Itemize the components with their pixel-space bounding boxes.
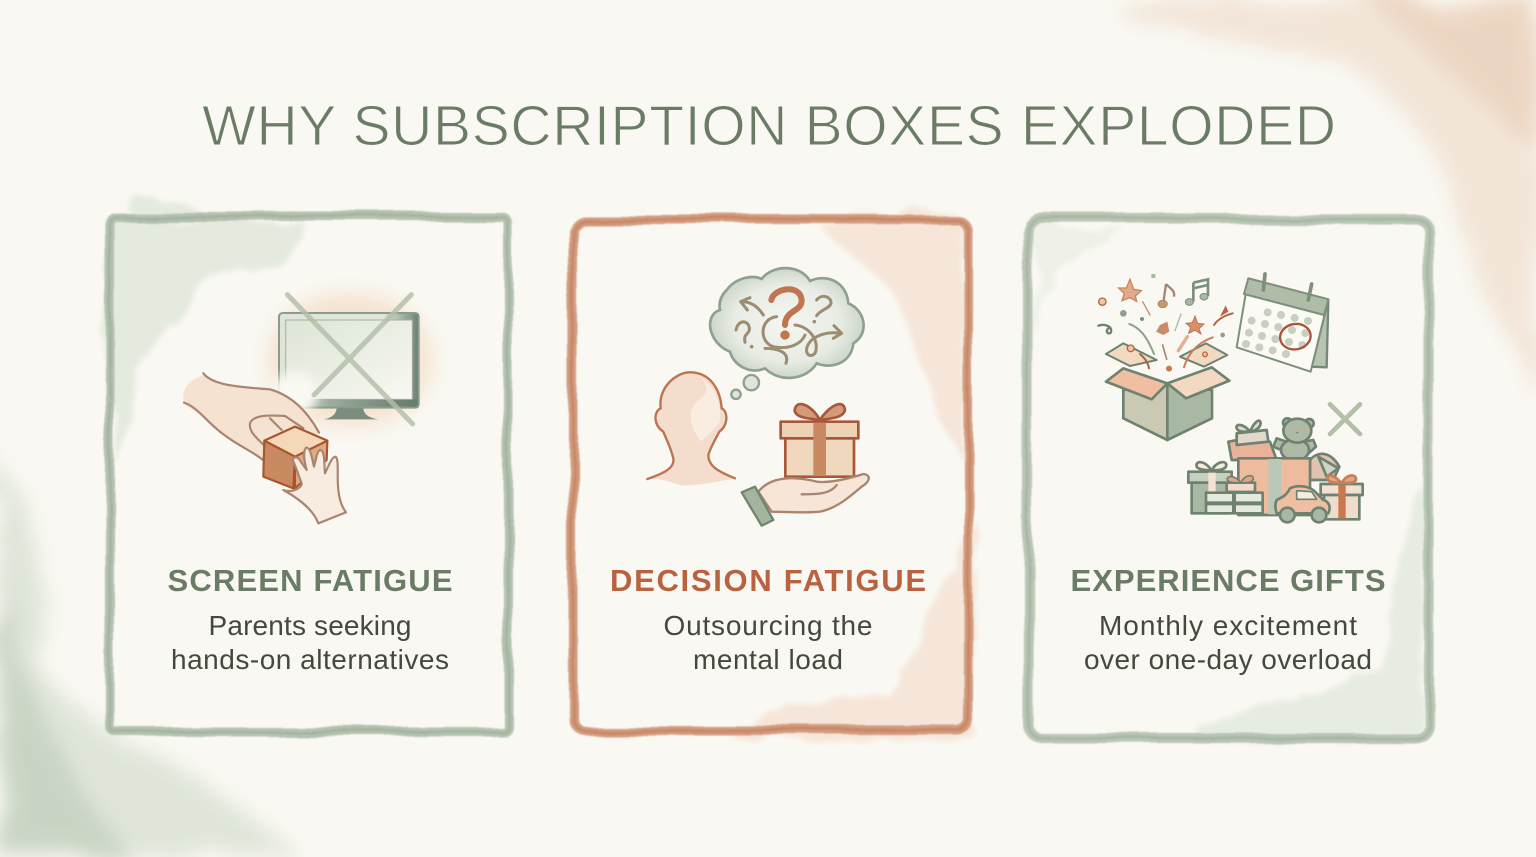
adult hand: [183, 373, 319, 465]
description: [171, 610, 449, 675]
calendar: [1237, 274, 1328, 372]
card wash: green blotches: [1035, 225, 1425, 740]
card frame: [110, 217, 508, 732]
title: WHY SUBSCRIPTION BOXES EXPLODED: [202, 94, 1336, 158]
card wash: green blotches: [106, 196, 301, 470]
open hand: [742, 474, 869, 526]
panel: screen fatigue: [106, 196, 508, 732]
description: Parents seeking: [208, 610, 412, 641]
description: Outsourcing the: [664, 610, 872, 641]
card frame: [573, 220, 968, 730]
card frame: [1028, 218, 1429, 738]
description: hands-on alternatives: [171, 644, 449, 675]
background wash: peach top right: [1100, 0, 1536, 400]
pile of gifts: [1188, 418, 1363, 522]
description: [664, 610, 872, 675]
teddy bear: [1273, 418, 1316, 461]
panel: experience gifts: [1028, 218, 1429, 740]
screen glow: [268, 293, 432, 427]
child hand: [283, 448, 346, 523]
card wash: peach blotches: [730, 206, 975, 738]
confetti, stars and music notes: [1098, 274, 1233, 372]
open box: [1106, 343, 1229, 440]
panel: decision fatigue: [573, 206, 975, 738]
monitor: [272, 312, 419, 419]
thought bubbles: [731, 375, 759, 399]
icon: open box, calendar, pile of gifts: [1098, 274, 1363, 522]
question marks and arrows: [736, 289, 842, 363]
icon: screen crossed out, hands passing box: [183, 293, 432, 523]
head silhouette: [647, 372, 735, 485]
heading: SCREEN FATIGUE: [168, 563, 452, 598]
description: over one-day overload: [1084, 644, 1372, 675]
toy car: [1275, 486, 1330, 513]
heading: DECISION FATIGUE: [610, 563, 926, 598]
small box: [263, 427, 327, 488]
description: Monthly excitement: [1099, 610, 1357, 641]
heading: EXPERIENCE GIFTS: [1070, 563, 1386, 598]
gift box: [781, 404, 858, 477]
cross mark: [287, 295, 413, 424]
cross mark: [1330, 404, 1360, 434]
back gifts: [1228, 438, 1277, 460]
description: [1084, 610, 1372, 675]
icon: head, thought cloud, gift on hand: [647, 268, 869, 526]
thought cloud: [710, 268, 864, 378]
description: mental load: [693, 644, 843, 675]
background wash: green bottom left: [0, 465, 300, 857]
